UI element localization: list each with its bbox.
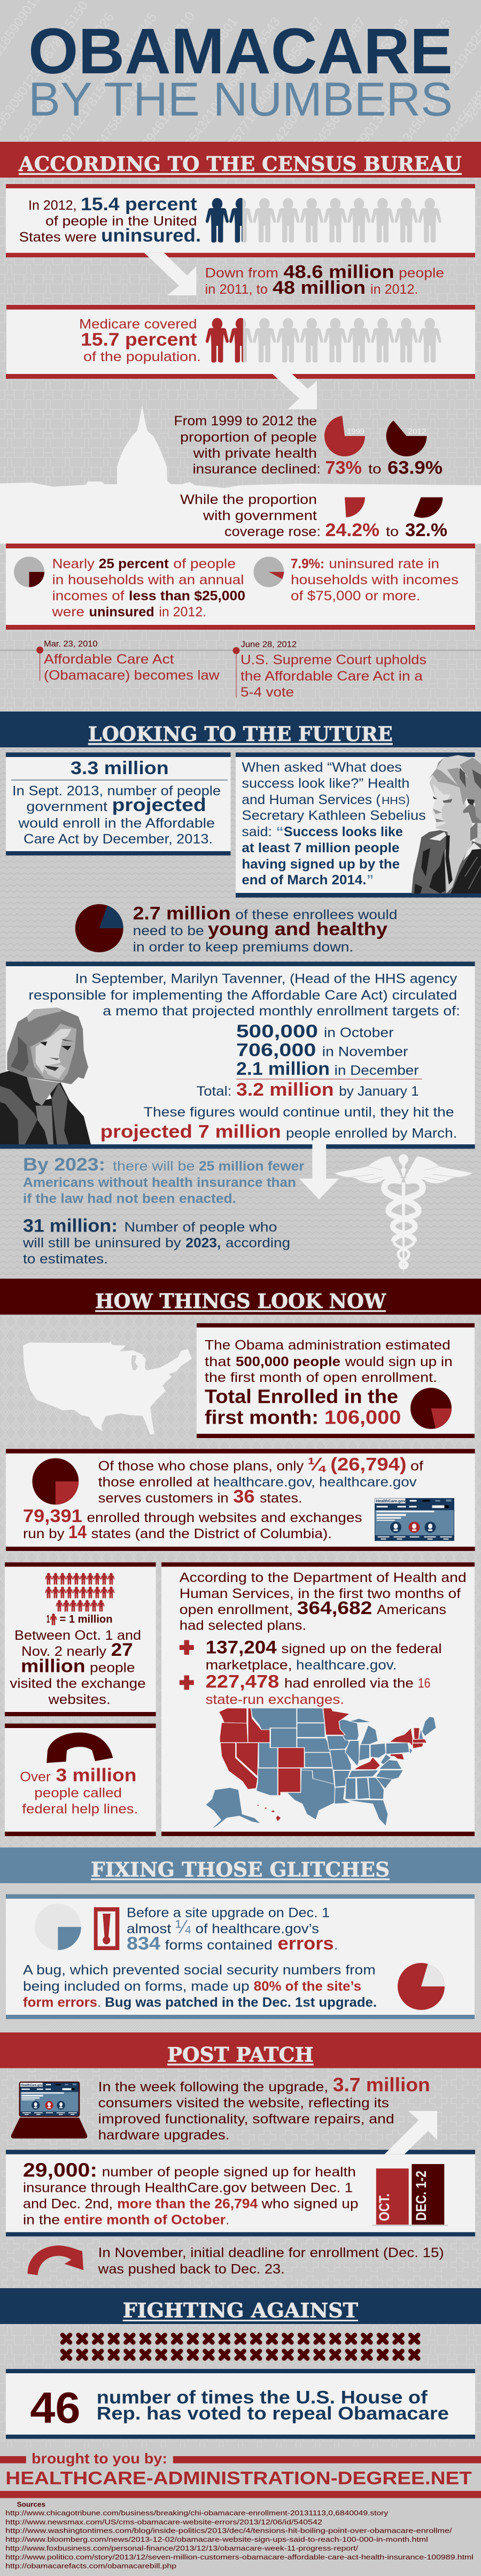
text: private insurance decline: 63.9%	[387, 458, 443, 478]
text: monthly enrollment targets: 500,000	[236, 1021, 318, 1042]
footer: brought to you by: brought to you by:	[32, 2450, 167, 2466]
text: sebelius quote: at least 7 million people	[242, 840, 399, 855]
text: projected 7 million: projected 7 million	[100, 1122, 281, 1142]
text: down from 48.6 million: in 2011, to	[205, 282, 268, 297]
panel: medicare	[6, 305, 475, 379]
sources: Sources	[17, 2501, 45, 2509]
text: federal marketplace	[206, 1637, 442, 1672]
panel: 46 votes	[6, 2369, 475, 2439]
text: 29,000 sign-ups: and Dec. 2nd,	[23, 2197, 113, 2212]
text: help line calls: 3 million	[56, 1765, 136, 1786]
text: low income households: were	[51, 605, 84, 620]
text: sebelius quote: “	[276, 824, 284, 839]
timeline event: 2012: 5-4 vote	[241, 685, 294, 700]
text: sebelius quote: When asked “What does	[242, 760, 402, 775]
text: government coverage rise	[180, 492, 447, 540]
text: state exchanges: had enrolled via the	[284, 1676, 414, 1691]
text: 31 million: according	[226, 1236, 290, 1251]
text: medicare share: 15.7 percent	[81, 330, 197, 350]
text: sebelius quote: having signed up by the	[242, 857, 400, 872]
text: total enrolled: Total Enrolled in the	[205, 1386, 398, 1408]
text: young and healthy: need to be	[133, 923, 204, 938]
text: monthly enrollment targets: in December	[335, 1063, 419, 1078]
text: state exchanges: 79,391	[23, 1506, 82, 1526]
header number pattern: 6545561234500213952495	[306, 14, 412, 157]
map: state exchanges by state	[206, 1708, 436, 1830]
text: exchange visitors: websites.	[48, 1692, 111, 1707]
pie chart: government coverage 2012	[414, 498, 443, 518]
timeline event: 2010	[36, 640, 220, 683]
text: week after upgrade: hardware upgrades.	[98, 2128, 229, 2143]
title: OBAMACARE	[28, 14, 453, 87]
text: help line calls	[20, 1765, 138, 1816]
text: private insurance decline: From 1999 to 2012 the	[174, 414, 317, 429]
text: total enrolled: 106,000	[324, 1407, 401, 1428]
header number pattern: 3971237815801020112345	[55, 10, 160, 151]
text: social security bug	[23, 1963, 377, 2010]
pie chart: 80 percent of errors	[398, 1963, 445, 2010]
text: by 2023	[23, 1155, 305, 1206]
text: uninsured share: In 2012,	[28, 198, 77, 213]
text: down from 48.6 million: 48 million	[273, 278, 366, 298]
text: week after upgrade: improved functionality, software repairs, and	[98, 2112, 394, 2127]
text: memo introduction: In September, Marilyn Tavenner, (Head of the HHS agency	[75, 972, 457, 987]
pie chart: private coverage 2012: 2012	[408, 427, 426, 435]
illustration: united states silhouette	[23, 1341, 192, 1435]
text: medicare share: of the population.	[83, 349, 201, 364]
text: healthcare.gov enrollment	[98, 1454, 423, 1507]
text: deadline pushed back: In November, initial deadline for enrollment (Dec. 15)	[98, 2245, 444, 2260]
text: estimate: would sign up in	[345, 1354, 453, 1369]
sources: http://www.politico.com/story/2013/12/seven-million-customers-obamacare-affordable-care-act-health-insurance-100989.html	[5, 2553, 474, 2561]
sources: http://www.washingtontimes.com/blog/inside-politics/2013/dec/4/tensions-hit-boiling-point-over-obamacare-enrollme/	[5, 2527, 452, 2535]
sources: http://www.bloomberg.com/news/2013-12-02/obamacare-website-sign-ups-said-to-reach-100-000-in-month.html	[5, 2535, 428, 2543]
text: 29,000 sign-ups: 29,000:	[23, 2159, 97, 2181]
panel: 46 votes: 46	[30, 2383, 80, 2432]
heading: fixing those glitches	[0, 1847, 481, 1883]
text: 31 million: Number of people who	[124, 1220, 277, 1235]
timeline event: 2012: U.S. Supreme Court upholds	[241, 653, 426, 668]
icon: row of ten people, 15.7 percent red	[206, 318, 441, 363]
text: private insurance decline: insurance declined:	[192, 462, 321, 477]
text: private insurance decline	[174, 414, 443, 478]
text: 29,000 sign-ups: number of people signed up for health	[102, 2165, 356, 2180]
header number pattern: 8090131109876521527575	[348, 15, 454, 157]
footer: brought to you by	[0, 2450, 481, 2498]
title	[28, 14, 453, 126]
illustration: capitol silhouette and white ground	[0, 406, 481, 544]
timeline event: 2010: Mar. 23, 2010	[44, 640, 98, 648]
icon: 27 people	[45, 1573, 114, 1611]
text: healthcare.gov enrollment: healthcare.gov,	[213, 1474, 315, 1489]
text: uninsured share	[19, 194, 201, 246]
text: by 2023: Americans without health insurance than	[23, 1175, 296, 1190]
text: monthly enrollment targets: by January 1	[339, 1084, 419, 1099]
text: healthcare.gov enrollment: 36	[233, 1486, 254, 1507]
text: 29,000 sign-ups	[23, 2159, 358, 2228]
text: sebelius quote: said:	[242, 824, 272, 839]
text: 31 million: 2023,	[185, 1236, 221, 1251]
text: exchange visitors: Between Oct. 1 and	[14, 1628, 141, 1643]
text: monthly enrollment targets: 3.2 million	[236, 1080, 334, 1100]
icon: telephone handset	[46, 1732, 113, 1763]
sources: http://www.chicagotribune.com/business/breaking/chi-obamacare-enrollment-20131113,0,6840049.story	[5, 2509, 389, 2517]
text: estimate: the first month of open enrollment.	[205, 1370, 437, 1385]
heading: according to the census bureau	[0, 142, 481, 178]
panel: 3.3 million: projected	[112, 795, 206, 815]
text: 29,000 sign-ups: entire month of October	[64, 2213, 226, 2228]
text: site upgrade errors: ¼	[175, 1915, 191, 1937]
text: low income households: Nearly	[52, 556, 95, 571]
arrow: upward growth	[384, 2111, 437, 2154]
text: healthcare.gov enrollment: states.	[260, 1490, 302, 1505]
panel: income and uninsured rate	[6, 544, 475, 630]
text: sebelius quote: HHS	[382, 796, 406, 807]
text: projected 7 million: These figures would continue until, they hit the	[144, 1105, 454, 1120]
illustration: portrait of kathleen sebelius	[412, 755, 481, 893]
text: help line calls: people called	[34, 1786, 122, 1801]
text: low income households: in households with an annual	[52, 572, 244, 587]
icon: curved arrow	[28, 2245, 83, 2275]
text: 29,000 sign-ups: more than the 26,794	[117, 2197, 258, 2212]
illustration: portrait of marilyn tavenner	[0, 1007, 91, 1144]
text: 29,000 sign-ups: insurance through HealthCare.gov between Dec. 1	[23, 2181, 353, 2196]
pie chart: one quarter	[32, 1458, 79, 1504]
header number pattern: 8742604532190012345987	[263, 14, 369, 157]
text: by 2023: 25 million fewer	[199, 1159, 305, 1174]
icon: rows of 46 x marks	[59, 2332, 423, 2362]
text: social security bug: Bug was patched in the Dec. 1st upgrade.	[105, 1995, 377, 2010]
text: exchange visitors	[10, 1628, 146, 1707]
text: 31 million: 31 million:	[23, 1216, 118, 1236]
icon: plus cross, states	[180, 1676, 194, 1690]
text: site upgrade errors: of healthcare.gov’s	[196, 1921, 319, 1936]
text: federal marketplace: 137,204	[206, 1637, 277, 1657]
timeline event: 2012	[233, 640, 426, 700]
text: government coverage rise: While the proportion	[180, 492, 317, 507]
text: sebelius quote: success look like?” Health	[242, 776, 409, 791]
text: young and healthy	[133, 903, 397, 954]
title: BY THE NUMBERS	[28, 72, 453, 126]
sources: http://obamacarefacts.com/obamacarebill.php	[5, 2562, 176, 2570]
text: state exchanges: enrolled through websites and exchanges	[87, 1510, 362, 1525]
text: low income households: less than $25,000	[129, 588, 245, 603]
text: state exchanges: states (and the District of Columbia).	[91, 1526, 332, 1541]
text: help line calls: Over	[20, 1770, 51, 1785]
pie chart: private coverage 1999	[324, 416, 365, 456]
panel: uninsured	[6, 184, 475, 257]
text: government coverage rise: with government	[203, 508, 317, 523]
text: private insurance decline: 73%	[325, 458, 362, 478]
timeline event: 2010: Affordable Care Act	[44, 652, 174, 667]
bar chart: october versus december sign-ups	[372, 2164, 448, 2226]
pie chart: private coverage 1999: 1999	[347, 427, 364, 435]
text: uninsured share: of people in the United	[45, 214, 197, 229]
heading: fighting against	[0, 2288, 481, 2324]
text: social security bug: form errors	[23, 1995, 97, 2010]
text: monthly enrollment targets: in November	[322, 1044, 408, 1059]
header number pattern	[0, 0, 481, 157]
icon: row of ten people, 15.4 percent blue	[206, 198, 441, 243]
text: monthly enrollment targets	[196, 1021, 422, 1100]
text: sebelius quote: end of March 2014.	[242, 873, 366, 888]
text: private insurance decline: proportion of people	[180, 430, 317, 445]
text: estimate: The Obama administration estimated	[205, 1338, 451, 1353]
panel: exchange visitors	[5, 1562, 156, 1716]
text: high income households: households with incomes	[291, 572, 459, 587]
text: uninsured share: uninsured.	[101, 226, 201, 246]
text: selected plans: Human Services, in the first two months of	[180, 1586, 461, 1601]
panel: chose plans	[6, 1449, 475, 1551]
pie chart: one quarter of forms	[35, 1904, 81, 1950]
text: private insurance decline: with private health	[192, 446, 317, 461]
pie chart: private coverage 2012	[386, 421, 427, 456]
text: state exchanges: 227,478	[206, 1671, 279, 1692]
text: 29,000 sign-ups: who signed up	[261, 2197, 358, 2212]
text: federal marketplace: signed up on the federal	[281, 1641, 442, 1656]
text: memo introduction: a memo that projected monthly enrollment targets of:	[103, 1004, 460, 1019]
panel: 3.3 million: Care Act by December, 2013.	[24, 832, 213, 847]
text: 29,000 sign-ups: .	[226, 2213, 229, 2228]
text: by 2023: By 2023:	[23, 1155, 105, 1175]
text: social security bug: being included on forms, made up	[23, 1979, 250, 1994]
text: estimate	[205, 1338, 453, 1385]
text: down from 48.6 million: in 2012.	[370, 282, 418, 297]
text: low income households: 25 percent	[99, 556, 169, 571]
panel: selected plans and state map	[161, 1562, 475, 1836]
text: low income households: in 2012.	[159, 605, 206, 620]
text: state exchanges: 16	[418, 1676, 430, 1691]
text: selected plans: Americans	[377, 1602, 446, 1617]
text: government coverage rise: to	[386, 524, 399, 539]
text: total enrolled: first month:	[205, 1407, 319, 1428]
pie chart: enrolled versus estimate	[410, 1388, 452, 1429]
panel: sebelius quote	[236, 752, 481, 898]
heading: looking to the future: LOOKING TO THE FUTURE	[88, 722, 393, 746]
text: exchange visitors: people	[90, 1661, 135, 1676]
text: down from 48.6 million	[205, 262, 444, 298]
header number pattern: 1525110902987654321026	[12, 10, 117, 151]
text: high income households: of $75,000 or more.	[291, 588, 420, 603]
text: site upgrade errors	[127, 1905, 338, 1954]
heading: post patch: POST PATCH	[167, 2043, 314, 2066]
text: deadline pushed back: was pushed back to Dec. 23.	[98, 2261, 285, 2276]
text: site upgrade errors: Before a site upgrade on Dec. 1	[127, 1905, 330, 1920]
header number pattern: 6257718240023459580267	[220, 14, 326, 157]
timeline	[0, 640, 481, 700]
bar chart: october versus december sign-ups: DEC. 1-2	[413, 2170, 429, 2221]
panel: 3.3 million: would enroll in the Affordable	[18, 816, 215, 831]
arrow: down to 2023 projection	[299, 1144, 339, 1199]
text: week after upgrade: consumers visited the website, reflecting its	[98, 2096, 389, 2111]
text: sebelius quote: Secretary Kathleen Sebelius	[242, 808, 426, 823]
text: down from 48.6 million: people	[399, 266, 444, 281]
header number pattern: 7654321005468878876543	[177, 14, 283, 157]
heading: looking to the future	[0, 712, 481, 747]
text: social security bug: A bug, which prevented social security numbers from	[23, 1963, 376, 1978]
text: high income households: 7.9%:	[291, 556, 324, 571]
icon: plus cross, federal	[180, 1640, 194, 1655]
text: government coverage rise: coverage rose:	[224, 524, 321, 539]
text: site upgrade errors: errors	[278, 1933, 334, 1954]
panel: help lines	[5, 1724, 156, 1836]
icon: healthcare.gov website screenshot	[375, 1499, 454, 1541]
text: state exchanges	[206, 1671, 430, 1707]
text: selected plans: open enrollment,	[180, 1602, 293, 1617]
text: down from 48.6 million: Down from	[205, 266, 278, 281]
text: young and healthy: 2.7 million	[133, 903, 231, 923]
text: monthly enrollment targets: Total:	[196, 1084, 231, 1099]
text: projected 7 million: people enrolled by March.	[286, 1126, 457, 1141]
text: selected plans: had selected plans.	[180, 1618, 306, 1633]
text: memo introduction	[28, 972, 460, 1019]
text: sebelius quote	[242, 760, 426, 888]
legend: one person equals one million: = 1 million	[60, 1614, 112, 1625]
pie chart: young and healthy enrollees	[75, 904, 123, 952]
text: federal marketplace: marketplace,	[206, 1657, 292, 1672]
panel: 46 votes: number of times the U.S. House of	[97, 2388, 428, 2408]
panel: form errors	[6, 1894, 475, 2019]
text: 31 million: to estimates.	[23, 1252, 108, 1267]
arrow: down to private insurance	[273, 374, 317, 409]
text: sebelius quote: and Human Services (	[242, 792, 381, 807]
heading: how things look now	[0, 1279, 481, 1314]
text: deadline pushed back	[98, 2245, 444, 2276]
panel: 3.3 million: 3.3 million	[71, 758, 169, 778]
text: projected 7 million	[100, 1105, 457, 1142]
heading: post patch	[0, 2032, 481, 2068]
text: social security bug: 80% of the site’s	[254, 1979, 361, 1994]
header number pattern: 7894612345678100725801	[135, 14, 241, 157]
text: by 2023: there will be	[113, 1159, 195, 1174]
text: private insurance decline: to	[368, 462, 382, 477]
heading: fighting against: FIGHTING AGAINST	[123, 2299, 358, 2322]
text: exchange visitors: visited the exchange	[10, 1676, 146, 1691]
timeline event: 2012: the Affordable Care Act in a	[241, 669, 423, 684]
text: site upgrade errors: 834	[127, 1933, 160, 1954]
text: medicare share	[79, 317, 201, 364]
sources: http://www.foxbusiness.com/personal-finance/2013/12/13/obamacare-week-11-progress-report/	[5, 2544, 358, 2552]
icon: caduceus	[335, 1154, 472, 1274]
text: healthcare.gov enrollment: healthcare.gov	[319, 1474, 417, 1489]
text: exchange visitors: 27	[111, 1640, 133, 1660]
text: state exchanges: run by	[23, 1526, 65, 1541]
text: site upgrade errors: almost	[127, 1921, 171, 1936]
bar chart: october versus december sign-ups: OCT.	[376, 2193, 392, 2221]
text: sebelius quote: ”	[367, 873, 374, 888]
text: high income households	[291, 556, 459, 603]
text: low income households: of people	[173, 556, 236, 571]
pie chart: government coverage 1999	[345, 498, 365, 517]
sources	[5, 2501, 474, 2570]
panel: tavenner memo	[0, 962, 475, 1149]
text: state exchanges: state-run exchanges.	[206, 1692, 344, 1707]
text: federal marketplace: healthcare.gov.	[296, 1657, 397, 1672]
arrow: down to drop figures	[144, 253, 196, 295]
text: selected plans: According to the Department of Health and	[180, 1570, 467, 1585]
text: government coverage rise: 24.2%	[325, 520, 379, 540]
text: exchange visitors: Nov. 2 nearly	[21, 1644, 107, 1659]
text: sebelius quote: )	[406, 792, 409, 807]
text: monthly enrollment targets: in October	[324, 1026, 393, 1041]
text: state exchanges: 14	[68, 1522, 87, 1542]
panel: 3.3 million: In Sept. 2013, number of people	[12, 783, 221, 798]
text: healthcare.gov enrollment: ¼ (26,794)	[308, 1454, 407, 1474]
icon: laptop with website	[11, 2082, 87, 2138]
panel: total enrolled first month	[197, 1323, 475, 1438]
text: by 2023: if the law had not been enacted.	[23, 1191, 236, 1206]
text: low income households: incomes of	[52, 588, 125, 603]
text: uninsured share: States were	[19, 230, 97, 245]
text: medicare share: Medicare covered	[79, 317, 197, 332]
text: young and healthy: young and healthy	[208, 919, 387, 939]
text: monthly enrollment targets: 2.1 million	[236, 1059, 330, 1079]
heading: how things look now: HOW THINGS LOOK NOW	[95, 1289, 386, 1313]
footer: brought to you by: HEALTHCARE-ADMINISTRATION-DEGREE.NET	[5, 2468, 472, 2488]
text: young and healthy: in order to keep premiums down.	[133, 939, 353, 954]
text: 31 million	[22, 1216, 290, 1267]
text: memo introduction: responsible for implementing the Affordable Care Act) circulated	[28, 988, 457, 1003]
legend: one person equals one million: 1	[46, 1614, 50, 1625]
text: week after upgrade: In the week following the upgrade,	[98, 2080, 328, 2095]
text: healthcare.gov enrollment: those enrolled at	[98, 1474, 210, 1489]
icon: exclamation sign	[94, 1907, 119, 1950]
text: monthly enrollment targets: 706,000	[236, 1040, 316, 1060]
text: 31 million: will still be uninsured by	[22, 1236, 181, 1251]
text: high income households: uninsured rate in	[329, 556, 439, 571]
text: estimate: 500,000 people	[236, 1354, 340, 1369]
pie chart: low income	[14, 556, 44, 587]
text: site upgrade errors: .	[335, 1938, 338, 1953]
text: healthcare.gov enrollment: of	[410, 1458, 423, 1473]
text: week after upgrade	[98, 2074, 430, 2143]
text: healthcare.gov enrollment: Of those who chose plans, only	[98, 1458, 304, 1473]
text: sebelius quote: Success looks like	[284, 824, 403, 839]
header number pattern: 5475881234567896001010	[92, 9, 198, 151]
text: exchange visitors: million	[21, 1656, 86, 1677]
panel: 3.3 million	[6, 752, 231, 855]
pie chart: high income	[253, 556, 284, 587]
text: down from 48.6 million: 48.6 million	[283, 262, 394, 282]
timeline event: 2012: June 28, 2012	[241, 640, 297, 649]
sources: http://www.newsmax.com/US/cms-obamacare-website-errors/2013/12/06/id/540542	[5, 2518, 322, 2526]
text: government coverage rise: 32.%	[405, 520, 447, 540]
text: selected plans: 364,682	[297, 1598, 372, 1618]
text: low income households: uninsured	[89, 605, 154, 620]
heading: according to the census bureau: ACCORDING TO THE CENSUS BUREAU	[18, 152, 462, 176]
text: total enrolled	[205, 1386, 401, 1428]
text: help line calls: federal help lines.	[22, 1801, 138, 1816]
text: uninsured share: 15.4 percent	[81, 194, 197, 215]
panel: 46 votes: Rep. has voted to repeal Obamacare	[97, 2404, 449, 2424]
text: young and healthy: of these enrollees would	[235, 907, 397, 922]
text: healthcare.gov enrollment: serves customers in	[98, 1490, 229, 1505]
text: state exchanges	[23, 1506, 362, 1542]
text: 29,000 sign-ups: in the	[23, 2213, 60, 2228]
timeline event: 2010: (Obamacare) becomes law	[44, 668, 220, 683]
text: selected plans	[180, 1570, 467, 1633]
panel: 29,000 sign-ups	[6, 2150, 475, 2236]
text: week after upgrade: 3.7 million	[333, 2074, 430, 2096]
text: site upgrade errors: forms contained	[165, 1938, 273, 1953]
panel: 3.3 million: government	[26, 799, 107, 814]
text: estimate: that	[205, 1354, 231, 1369]
text: low income households	[51, 556, 245, 620]
heading: fixing those glitches: FIXING THOSE GLITCHES	[91, 1858, 390, 1881]
text: social security bug: .	[97, 1995, 100, 2010]
